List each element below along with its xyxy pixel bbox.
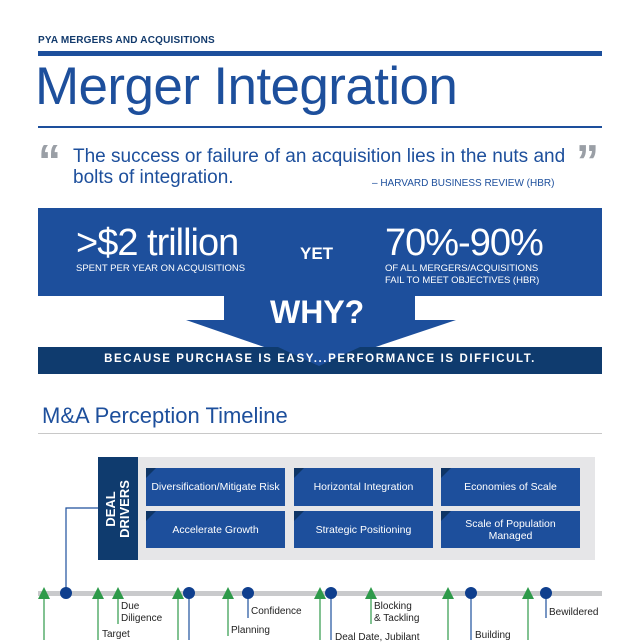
label: Target (102, 629, 130, 640)
label: Blocking (374, 601, 412, 612)
stat: 2 trillion: >$2 trillion (76, 222, 238, 264)
stat: 70-90%: OF ALL MERGERS/ACQUISITIONS (385, 263, 538, 274)
label: Deal Date, Jubilant (335, 632, 420, 643)
driver: Managed (489, 530, 532, 542)
label: Due (121, 601, 139, 612)
panel: deal drivers (98, 457, 595, 560)
label (374, 601, 419, 624)
label (121, 601, 162, 624)
deal drivers label: DEAL (103, 491, 118, 527)
driver (294, 468, 433, 506)
stats panel with arrow (38, 208, 602, 374)
WHY: WHY? (270, 294, 364, 330)
label: Building (475, 630, 511, 641)
driver: Diversification/Mitigate Risk (151, 481, 280, 493)
label: Confidence (251, 606, 302, 617)
driver: Horizontal Integration (314, 481, 413, 493)
driver (294, 511, 433, 548)
stat: 70-90% (385, 222, 543, 286)
driver (146, 511, 285, 548)
answer banner: BECAUSE PURCHASE IS EASY...PERFORMANCE IS DIFFICULT. (104, 353, 536, 365)
timeline (38, 507, 602, 640)
label: Bewildered (549, 607, 598, 618)
stat: 70-90%: 70%-90% (385, 222, 543, 264)
driver: Economies of Scale (464, 481, 557, 493)
header kicker: PYA MERGERS AND ACQUISITIONS (38, 35, 215, 46)
driver: Scale of Population (465, 518, 556, 530)
section title: M&A Perception Timeline (42, 403, 288, 428)
label: Diligence (121, 613, 162, 624)
driver (146, 468, 285, 506)
stat: 2 trillion: SPENT PER YEAR ON ACQUISITIONS (76, 263, 245, 274)
icon: close quote: ” (576, 135, 599, 187)
attribution: – HARVARD BUSINESS REVIEW (HBR) (372, 178, 554, 189)
icon: open quote: “ (38, 135, 61, 187)
header bar (38, 51, 602, 56)
label: & Tackling (374, 613, 419, 624)
quote (38, 135, 599, 189)
deal drivers label: DRIVERS (117, 480, 132, 538)
title: Merger Integration (35, 57, 457, 116)
driver: Strategic Positioning (316, 524, 411, 536)
YET: YET (300, 244, 333, 263)
label: Planning (231, 625, 270, 636)
stat: 70-90%: FAIL TO MEET OBJECTIVES (HBR) (385, 275, 539, 286)
driver (441, 511, 580, 548)
driver: Accelerate Growth (172, 524, 259, 536)
driver (441, 468, 580, 506)
deal drivers label (98, 457, 138, 560)
quote text: The success or failure of an acquisition lies in the nuts and bolts of integration. (73, 146, 565, 188)
